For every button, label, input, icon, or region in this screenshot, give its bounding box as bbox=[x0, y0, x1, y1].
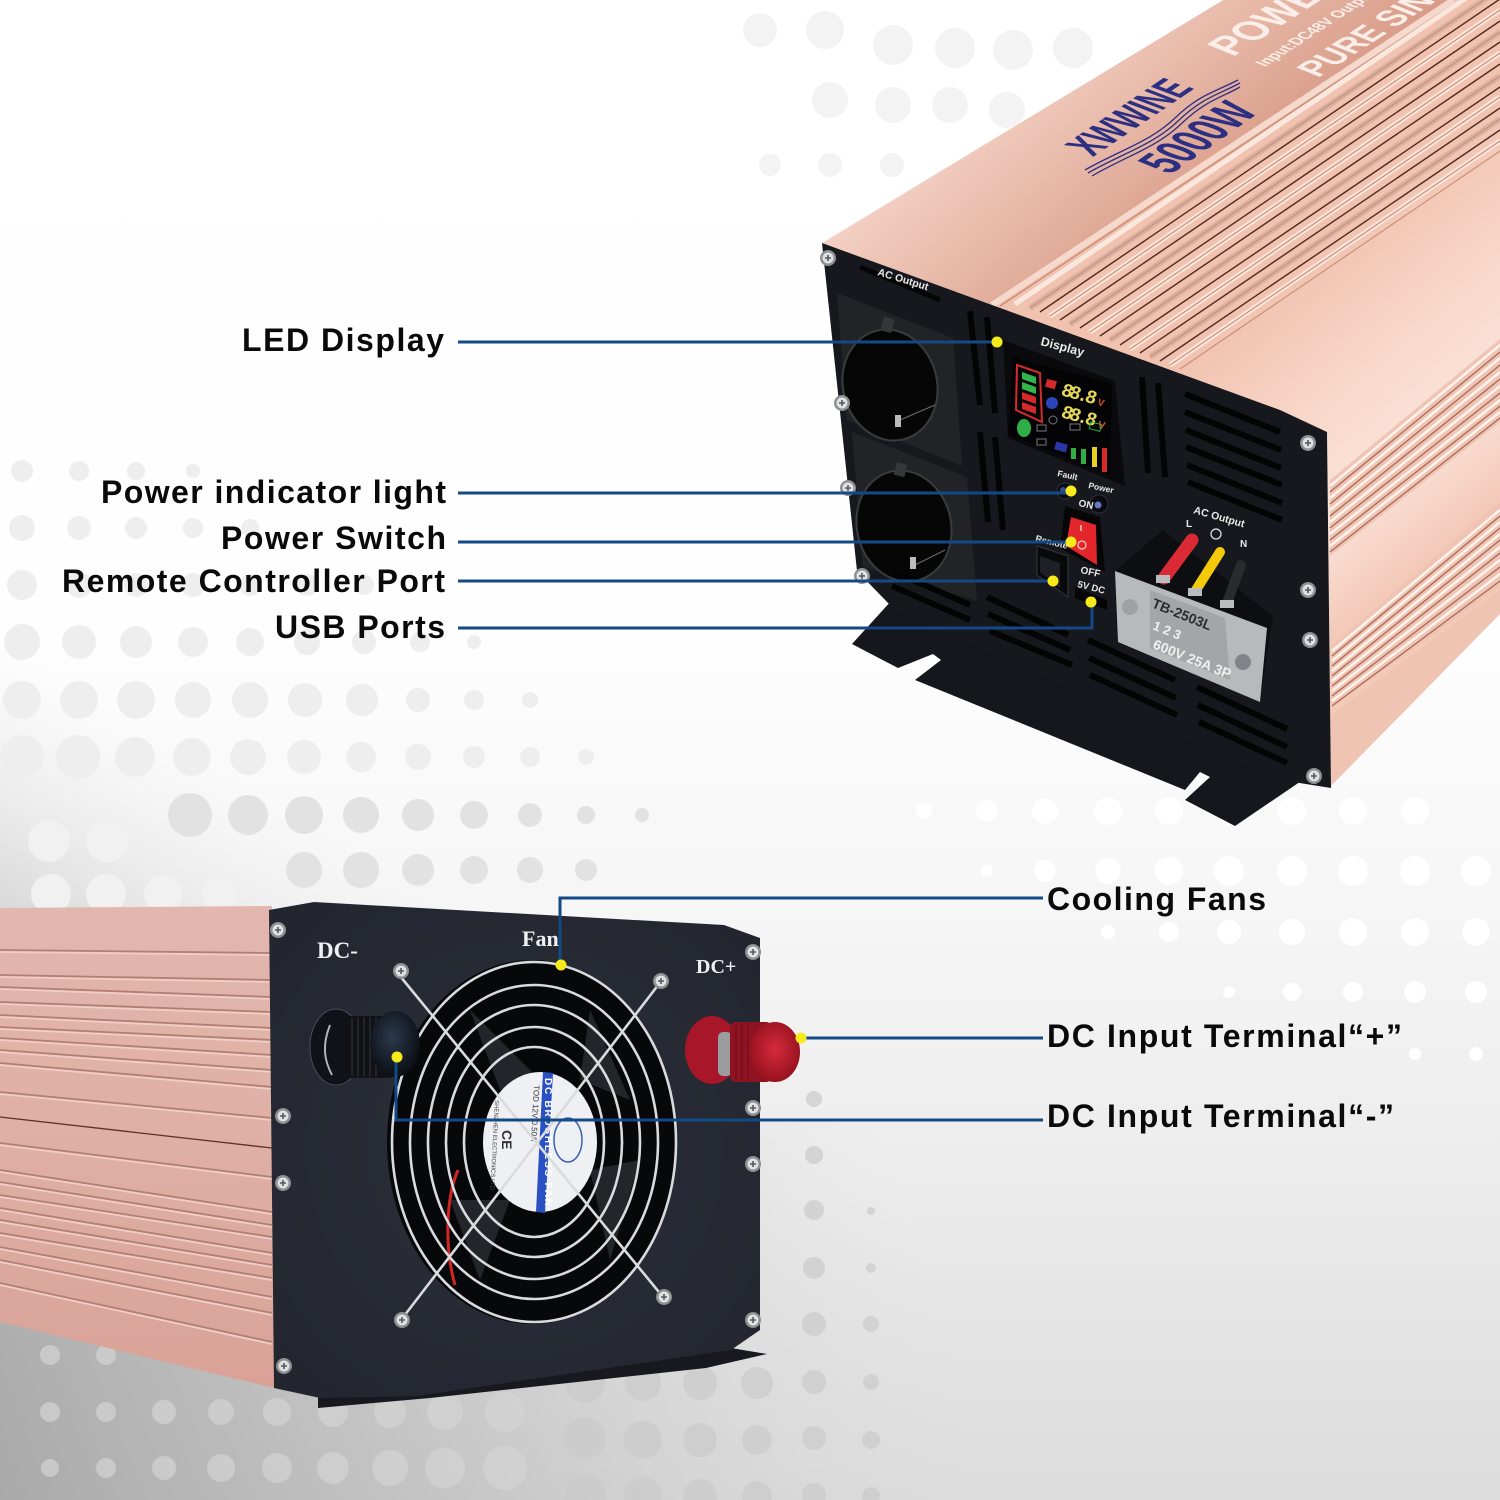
AC output terminal: AC Output bbox=[1192, 504, 1246, 530]
lower gray dots bbox=[564, 1091, 880, 1500]
fan housing bbox=[387, 960, 677, 1324]
V units: V bbox=[1096, 397, 1106, 410]
label DC-: DC- bbox=[317, 938, 358, 963]
wattage 5000W: 5000W bbox=[1126, 96, 1272, 179]
fan grille bbox=[392, 962, 676, 1322]
panel screws bbox=[820, 250, 1322, 784]
label DC+: DC+ bbox=[696, 956, 736, 978]
power LED: Power bbox=[1088, 480, 1115, 495]
mounting bracket (rear view) bbox=[318, 1348, 767, 1408]
AC output terminal: L bbox=[1186, 519, 1192, 530]
status icons bbox=[1017, 379, 1107, 472]
fan assembly bbox=[387, 960, 677, 1328]
power LED bbox=[1088, 480, 1115, 513]
USB port: 5V DC bbox=[1076, 579, 1106, 597]
label: DC Input Terminal +: DC Input Terminal“+” bbox=[1047, 1018, 1402, 1054]
lower light dots bbox=[40, 1345, 527, 1490]
panel plate bbox=[822, 243, 1331, 788]
AC output terminal: TB-2503L bbox=[1150, 595, 1215, 634]
clear cover bbox=[1115, 571, 1267, 702]
rear panel bbox=[269, 902, 800, 1398]
red wire bbox=[448, 1170, 458, 1285]
brand print on top face bbox=[1054, 0, 1500, 179]
label Fan: Fan bbox=[522, 926, 559, 951]
fan hub label bbox=[483, 1072, 597, 1213]
V units bottom: V bbox=[1096, 419, 1107, 433]
vent slots bbox=[892, 311, 1287, 763]
side face bbox=[992, 0, 1500, 786]
USB port bbox=[1075, 579, 1107, 610]
front panel bbox=[820, 243, 1331, 788]
LED display bbox=[1003, 340, 1125, 486]
DC plus terminal bbox=[685, 1016, 800, 1084]
remote port: Remote bbox=[1035, 533, 1069, 551]
wires bbox=[1164, 540, 1192, 578]
label: Power Switch: Power Switch bbox=[221, 520, 446, 556]
rocker switch bbox=[1060, 498, 1105, 580]
ridge highlight bbox=[992, 0, 1453, 305]
fault LED bbox=[1057, 468, 1079, 499]
AC output terminal: 600V 25A 3P bbox=[1151, 636, 1234, 682]
label: Power indicator light: Power indicator light bbox=[101, 474, 446, 510]
rocker switch: ON bbox=[1077, 498, 1094, 512]
fin bands bbox=[1030, 0, 1500, 357]
AC output vent and label bbox=[860, 267, 940, 300]
panel plate bbox=[269, 902, 760, 1398]
fan hub label: TOD 12V 0.50A bbox=[529, 1085, 541, 1142]
fan hub label: CE bbox=[499, 1130, 515, 1149]
AC output terminal: N bbox=[1240, 539, 1247, 550]
inverter top view: body bbox=[822, 0, 1500, 786]
right side: lower plain band bbox=[1331, 614, 1500, 786]
callout lines bbox=[396, 342, 1092, 1120]
top face bbox=[822, 0, 1453, 305]
grille screws bbox=[393, 963, 672, 1328]
fin dark lines bbox=[1040, 0, 1500, 361]
label: USB Ports: USB Ports bbox=[275, 609, 445, 645]
upper socket bbox=[831, 293, 962, 466]
AC output terminal: 1 2 3 bbox=[1151, 618, 1183, 643]
readout top: 88.8 bbox=[1058, 380, 1100, 410]
AC output label: AC Output bbox=[876, 266, 930, 293]
DC minus terminal bbox=[310, 1009, 420, 1085]
battery icon bbox=[1016, 365, 1042, 422]
label: DC Input Terminal -: DC Input Terminal“-” bbox=[1047, 1098, 1394, 1134]
left halftone dots bbox=[0, 460, 594, 779]
callout dots bbox=[392, 336, 1096, 1062]
readout bottom: 88.8 bbox=[1058, 402, 1100, 432]
label: Cooling Fans: Cooling Fans bbox=[1047, 881, 1266, 917]
mounting bracket (top view) bbox=[852, 600, 1310, 826]
logo: XWWINE: XWWINE bbox=[1054, 73, 1204, 161]
fault LED: Fault bbox=[1057, 468, 1079, 482]
AC output terminal bbox=[1115, 504, 1273, 702]
right side: stripe group two bbox=[1332, 501, 1500, 707]
fan hub label: DC BRUSHLESS FAN bbox=[542, 1078, 553, 1206]
display label: Display bbox=[1039, 334, 1086, 359]
rocker switch: OFF bbox=[1079, 565, 1101, 580]
inverter rear view: body bbox=[0, 900, 280, 1400]
remote port bbox=[1035, 533, 1069, 597]
fan hub label: SHENZHEN ELECTRONICS LTD bbox=[488, 1100, 499, 1191]
label: Remote Controller Port: Remote Controller Port bbox=[62, 563, 445, 599]
light dots right bbox=[916, 797, 1491, 1061]
logo waves bbox=[1085, 80, 1240, 176]
right side: stripe group one bbox=[1330, 339, 1500, 556]
top halftone dots bbox=[743, 11, 1093, 177]
panel screws bbox=[270, 922, 761, 1374]
label: LED Display: LED Display bbox=[242, 322, 444, 358]
lower socket bbox=[845, 432, 977, 601]
fan blades bbox=[450, 1010, 640, 1280]
